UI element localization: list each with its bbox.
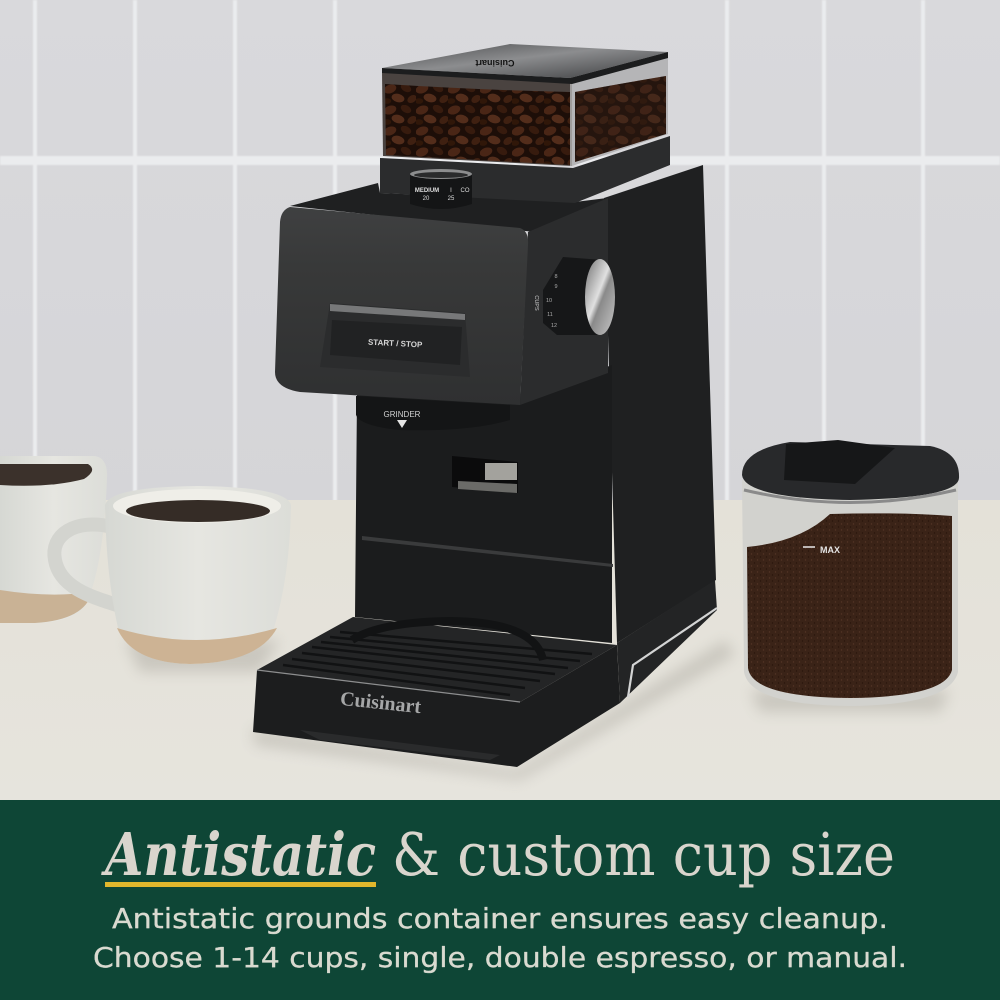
grind setting dial: CO <box>460 188 470 194</box>
headline: Antistatic <box>101 820 376 889</box>
description text: Antistatic grounds container ensures easy cleanup. <box>112 902 888 935</box>
start stop button <box>320 303 470 377</box>
tiled wall <box>0 0 1000 510</box>
start stop button: START / STOP <box>368 338 423 349</box>
headline: & custom cup size <box>392 820 895 889</box>
cup size dial: 12 <box>551 323 557 329</box>
description text: Choose 1-14 cups, single, double espresso, or manual. <box>93 941 907 974</box>
cup size dial: 8 <box>554 274 558 280</box>
bottom green band <box>0 800 1000 1000</box>
bean hopper <box>380 44 670 203</box>
cup size dial: 9 <box>554 284 558 290</box>
left mug <box>0 456 107 623</box>
cup size dial: 11 <box>547 312 553 318</box>
grinder head <box>275 183 615 430</box>
grind setting dial: 25 <box>448 196 455 202</box>
grind setting dial <box>410 169 472 209</box>
grinder collar: GRINDER <box>384 410 421 419</box>
counter <box>0 500 1000 800</box>
counter shadows <box>125 640 950 780</box>
cup size dial: CUPS <box>533 295 539 311</box>
grinder lower body <box>355 365 612 643</box>
grounds container: MAX <box>820 545 840 555</box>
grind setting dial: 20 <box>423 196 430 202</box>
front mug with handle <box>54 486 291 664</box>
cup size dial: 10 <box>546 298 552 304</box>
grinder outlet window <box>452 456 518 493</box>
grind setting dial: MEDIUM <box>415 188 439 194</box>
headline <box>101 820 895 889</box>
grind setting dial: I <box>450 188 452 194</box>
bean hopper: Cuisinart <box>475 58 515 68</box>
grounds container <box>742 440 959 706</box>
drip tray <box>253 617 620 767</box>
brand logo: Cuisinart <box>339 688 422 718</box>
grinder base plate <box>617 580 717 703</box>
grinder collar <box>356 396 510 430</box>
description text <box>93 902 907 974</box>
cup size dial <box>533 257 615 335</box>
grinder rear column <box>604 165 716 643</box>
